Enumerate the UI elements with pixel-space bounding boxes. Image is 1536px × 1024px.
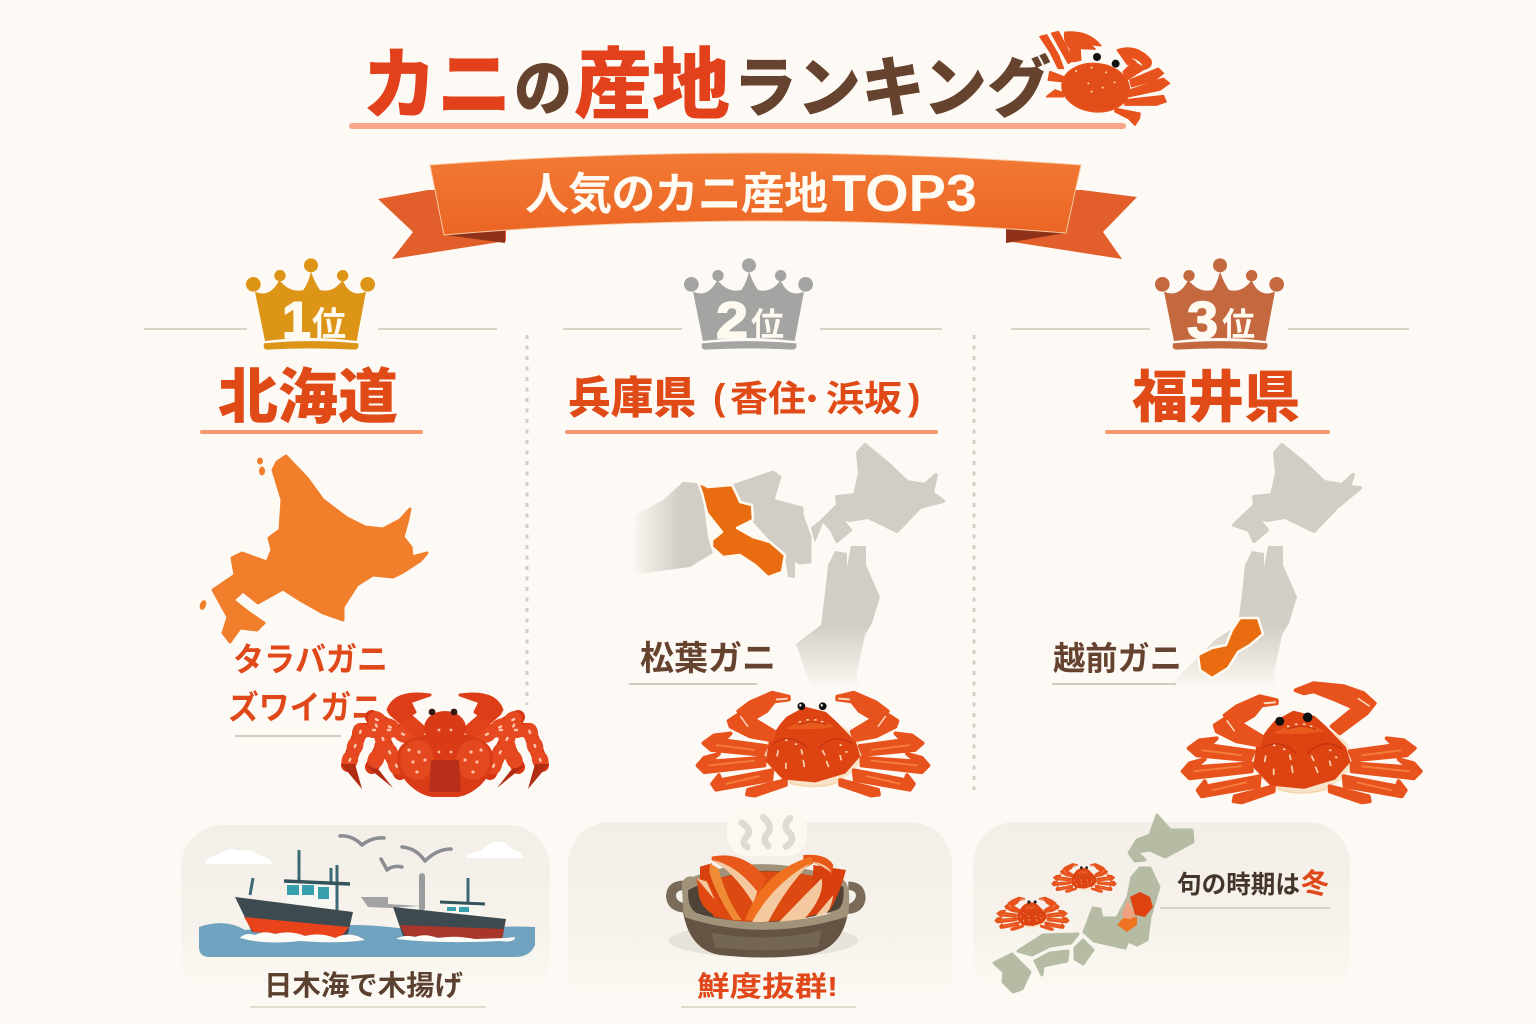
label: タラバガニ・ズワイガニ: タラバガニ xyxy=(233,641,388,678)
crown: 3位 xyxy=(1155,258,1284,350)
underline: 越前ガニ xyxy=(1052,683,1176,685)
crown: 1位: 位 xyxy=(312,306,346,344)
small crab 1 xyxy=(1052,864,1116,892)
heading: 兵庫県(香住・浜坂): ) xyxy=(908,377,920,418)
mini map of Japan xyxy=(994,815,1193,992)
caption: 句の時期は冬: 句の時期は xyxy=(1177,871,1300,899)
caption: 日木海で木揚げ: 日木海で木揚げ xyxy=(264,970,463,1001)
steam xyxy=(742,817,792,847)
heading: 兵庫県(香住・浜坂) xyxy=(568,374,920,423)
icon: title crab xyxy=(1040,32,1169,125)
ribbon banner xyxy=(378,153,1137,259)
boat 1 xyxy=(235,850,353,938)
title: カニの産地ランキング xyxy=(362,41,1051,129)
foam xyxy=(240,932,515,942)
panel: boats xyxy=(181,825,550,1000)
crown: 2位: 2 xyxy=(716,292,748,350)
heading: 兵庫県(香住・浜坂): ( xyxy=(713,377,726,418)
crown: 2位: 位 xyxy=(751,306,784,343)
contents xyxy=(703,871,837,922)
map: Japan with Fukui highlighted xyxy=(1165,445,1360,690)
heading: 兵庫県(香住・浜坂): 浜坂 xyxy=(826,378,902,419)
column dividers xyxy=(527,335,974,790)
underline: タラバガニ xyxy=(235,735,341,737)
panel: hot pot xyxy=(568,808,952,1010)
pot front xyxy=(683,910,848,957)
map: Hokkaido xyxy=(199,456,427,642)
ribbon heading xyxy=(525,165,977,223)
heading: 北海道: 北海道 xyxy=(218,364,398,431)
underline: 松葉ガニ xyxy=(629,683,757,685)
title: カニの産地ランキング: ランキング xyxy=(733,51,1051,125)
heading: 兵庫県(香住・浜坂): ・ xyxy=(797,384,827,417)
highlighted prefectures xyxy=(1117,892,1153,932)
label: タラバガニ・ズワイガニ: ズワイガニ xyxy=(228,689,382,726)
crown: 3位: 3 xyxy=(1187,292,1218,350)
crown: 3位: 位 xyxy=(1222,306,1255,343)
underline: 北海道 xyxy=(200,430,423,434)
underline: caption 2 xyxy=(681,1006,856,1008)
distant ship xyxy=(361,897,420,908)
caption: 鮮度抜群!: 鮮度抜群! xyxy=(697,971,838,1002)
map: Japan with Hyogo highlighted xyxy=(633,445,943,690)
panel: season map xyxy=(973,815,1350,1000)
title underline xyxy=(349,123,1126,129)
heading: 兵庫県(香住・浜坂): 香住 xyxy=(730,378,806,419)
illustration: king crab xyxy=(341,694,549,797)
crown: 2位 xyxy=(684,258,813,350)
birds xyxy=(340,836,451,870)
underline: 福井県 xyxy=(1105,430,1330,434)
label: タラバガニ・ズワイガニ xyxy=(228,641,388,726)
label: 松葉ガニ: 松葉ガニ xyxy=(640,640,776,678)
small crab 2 xyxy=(995,897,1069,930)
underline: 兵庫県 xyxy=(565,430,938,434)
illustration: snow crab (Hyogo) xyxy=(698,693,928,796)
underline: caption 3 xyxy=(1160,907,1330,909)
crown: 1位 xyxy=(246,258,375,350)
boat 2 xyxy=(393,876,506,940)
illustration: snow crab (Fukui) xyxy=(1183,683,1421,802)
label: 越前ガニ: 越前ガニ xyxy=(1053,640,1182,677)
heading: 兵庫県(香住・浜坂): 兵庫県 xyxy=(568,374,696,423)
ribbon heading: TOP3 xyxy=(832,165,977,223)
caption: 句の時期は冬: 冬 xyxy=(1301,868,1329,899)
title: カニの産地ランキング: カニ xyxy=(362,41,512,129)
ribbon heading: 人気のカニ産地 xyxy=(525,170,828,219)
crown: 1位: 1 xyxy=(282,292,311,350)
sea xyxy=(199,923,535,957)
rank divider lines xyxy=(144,328,1409,330)
title: カニの産地ランキング: の xyxy=(514,55,572,124)
clouds xyxy=(205,842,523,864)
heading: 福井県: 福井県 xyxy=(1132,366,1300,429)
underline: caption 1 xyxy=(250,1006,486,1008)
pot with crab legs xyxy=(666,817,866,957)
title: カニの産地ランキング: 産地 xyxy=(574,41,730,129)
